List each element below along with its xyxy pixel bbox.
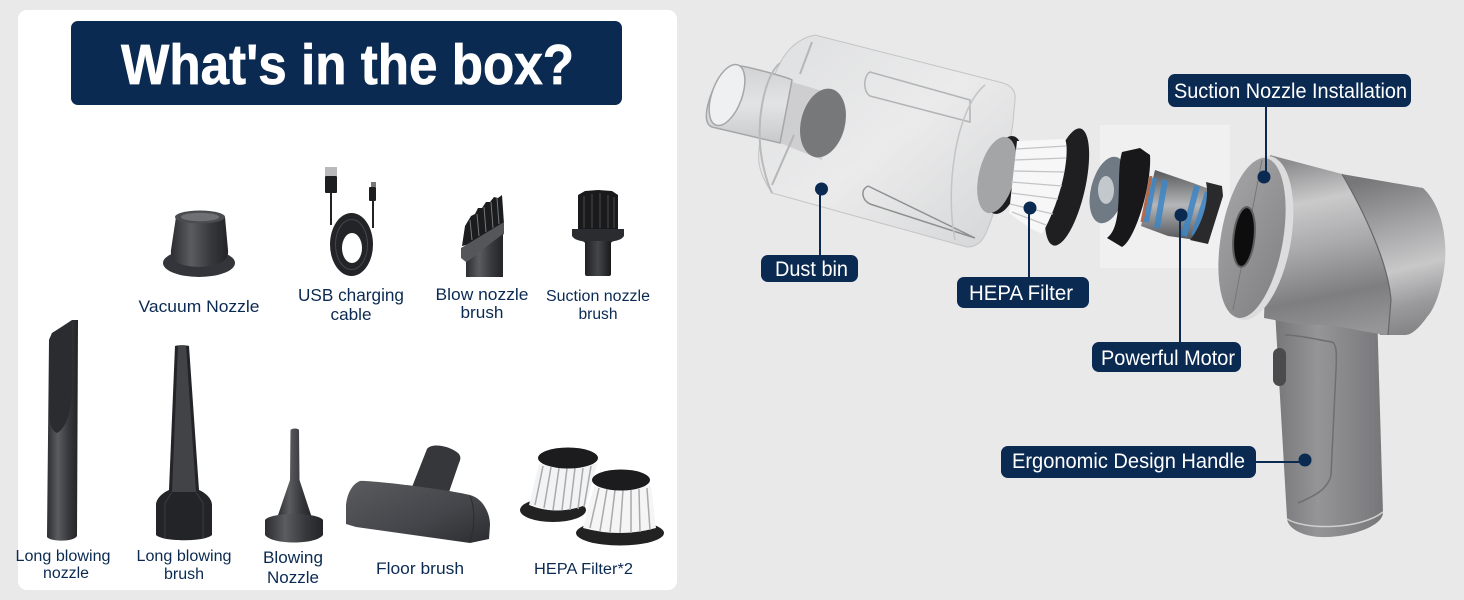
front face xyxy=(1207,153,1297,323)
product: handheld vacuum body xyxy=(1207,150,1445,537)
item: vacuum nozzle: Vacuum Nozzle xyxy=(138,297,260,316)
item: blowing nozzle: Blowing xyxy=(263,548,323,567)
power button xyxy=(1273,348,1286,386)
item: blowing nozzle xyxy=(263,428,323,587)
callout: HEPA filter: HEPA Filter xyxy=(969,282,1073,305)
item: USB charging cable: USB charging xyxy=(298,285,404,305)
item: floor brush xyxy=(346,446,490,578)
item: long blowing brush: Long blowing xyxy=(136,548,232,565)
item: HEPA filter x2: HEPA Filter*2 xyxy=(534,561,633,578)
item: long blowing nozzle xyxy=(16,320,110,582)
item: blow nozzle brush: brush xyxy=(460,303,504,322)
callout: suction nozzle installation: Suction Nozzle Installation xyxy=(1174,80,1407,103)
item: USB charging cable: cable xyxy=(330,305,372,324)
exploded part: HEPA filter xyxy=(970,124,1098,250)
exploded part: motor backdrop xyxy=(1100,125,1230,268)
item: long blowing nozzle: nozzle xyxy=(43,565,89,582)
callout: suction nozzle installation xyxy=(1168,74,1411,184)
handle xyxy=(1275,310,1383,537)
item: long blowing brush xyxy=(136,345,232,583)
front housing xyxy=(1264,155,1391,335)
item: suction nozzle brush: Suction nozzle xyxy=(546,288,650,305)
callout: powerful motor: Powerful Motor xyxy=(1101,347,1235,370)
callout: HEPA filter xyxy=(957,202,1089,308)
callout: powerful motor xyxy=(1092,208,1241,372)
title xyxy=(71,21,622,105)
item: floor brush: Floor brush xyxy=(376,559,464,578)
item: long blowing brush: brush xyxy=(164,566,204,583)
callout: ergonomic design handle xyxy=(1001,446,1312,478)
front face rim xyxy=(1207,150,1305,326)
panel: what's in the box xyxy=(16,10,677,590)
item: USB charging cable xyxy=(298,167,404,324)
rear cylinder xyxy=(1330,172,1445,335)
item: long blowing nozzle: Long blowing xyxy=(16,548,110,565)
exploded part: motor xyxy=(1083,148,1223,247)
item: suction nozzle brush xyxy=(546,190,650,323)
item: blow nozzle brush xyxy=(436,195,528,322)
exploded part: dust bin xyxy=(702,35,1015,247)
callout: dust bin: Dust bin xyxy=(775,258,848,281)
callout: dust bin xyxy=(761,182,858,282)
air inlet xyxy=(1230,206,1258,268)
item: blowing nozzle: Nozzle xyxy=(267,568,319,587)
item: blow nozzle brush: Blow nozzle xyxy=(436,285,528,304)
title: What's in the box? xyxy=(121,33,574,97)
item: HEPA filter x2 xyxy=(520,448,664,578)
callout: ergonomic design handle: Ergonomic Design Handle xyxy=(1012,450,1245,473)
item: vacuum nozzle xyxy=(138,210,260,316)
item: suction nozzle brush: brush xyxy=(578,306,618,323)
